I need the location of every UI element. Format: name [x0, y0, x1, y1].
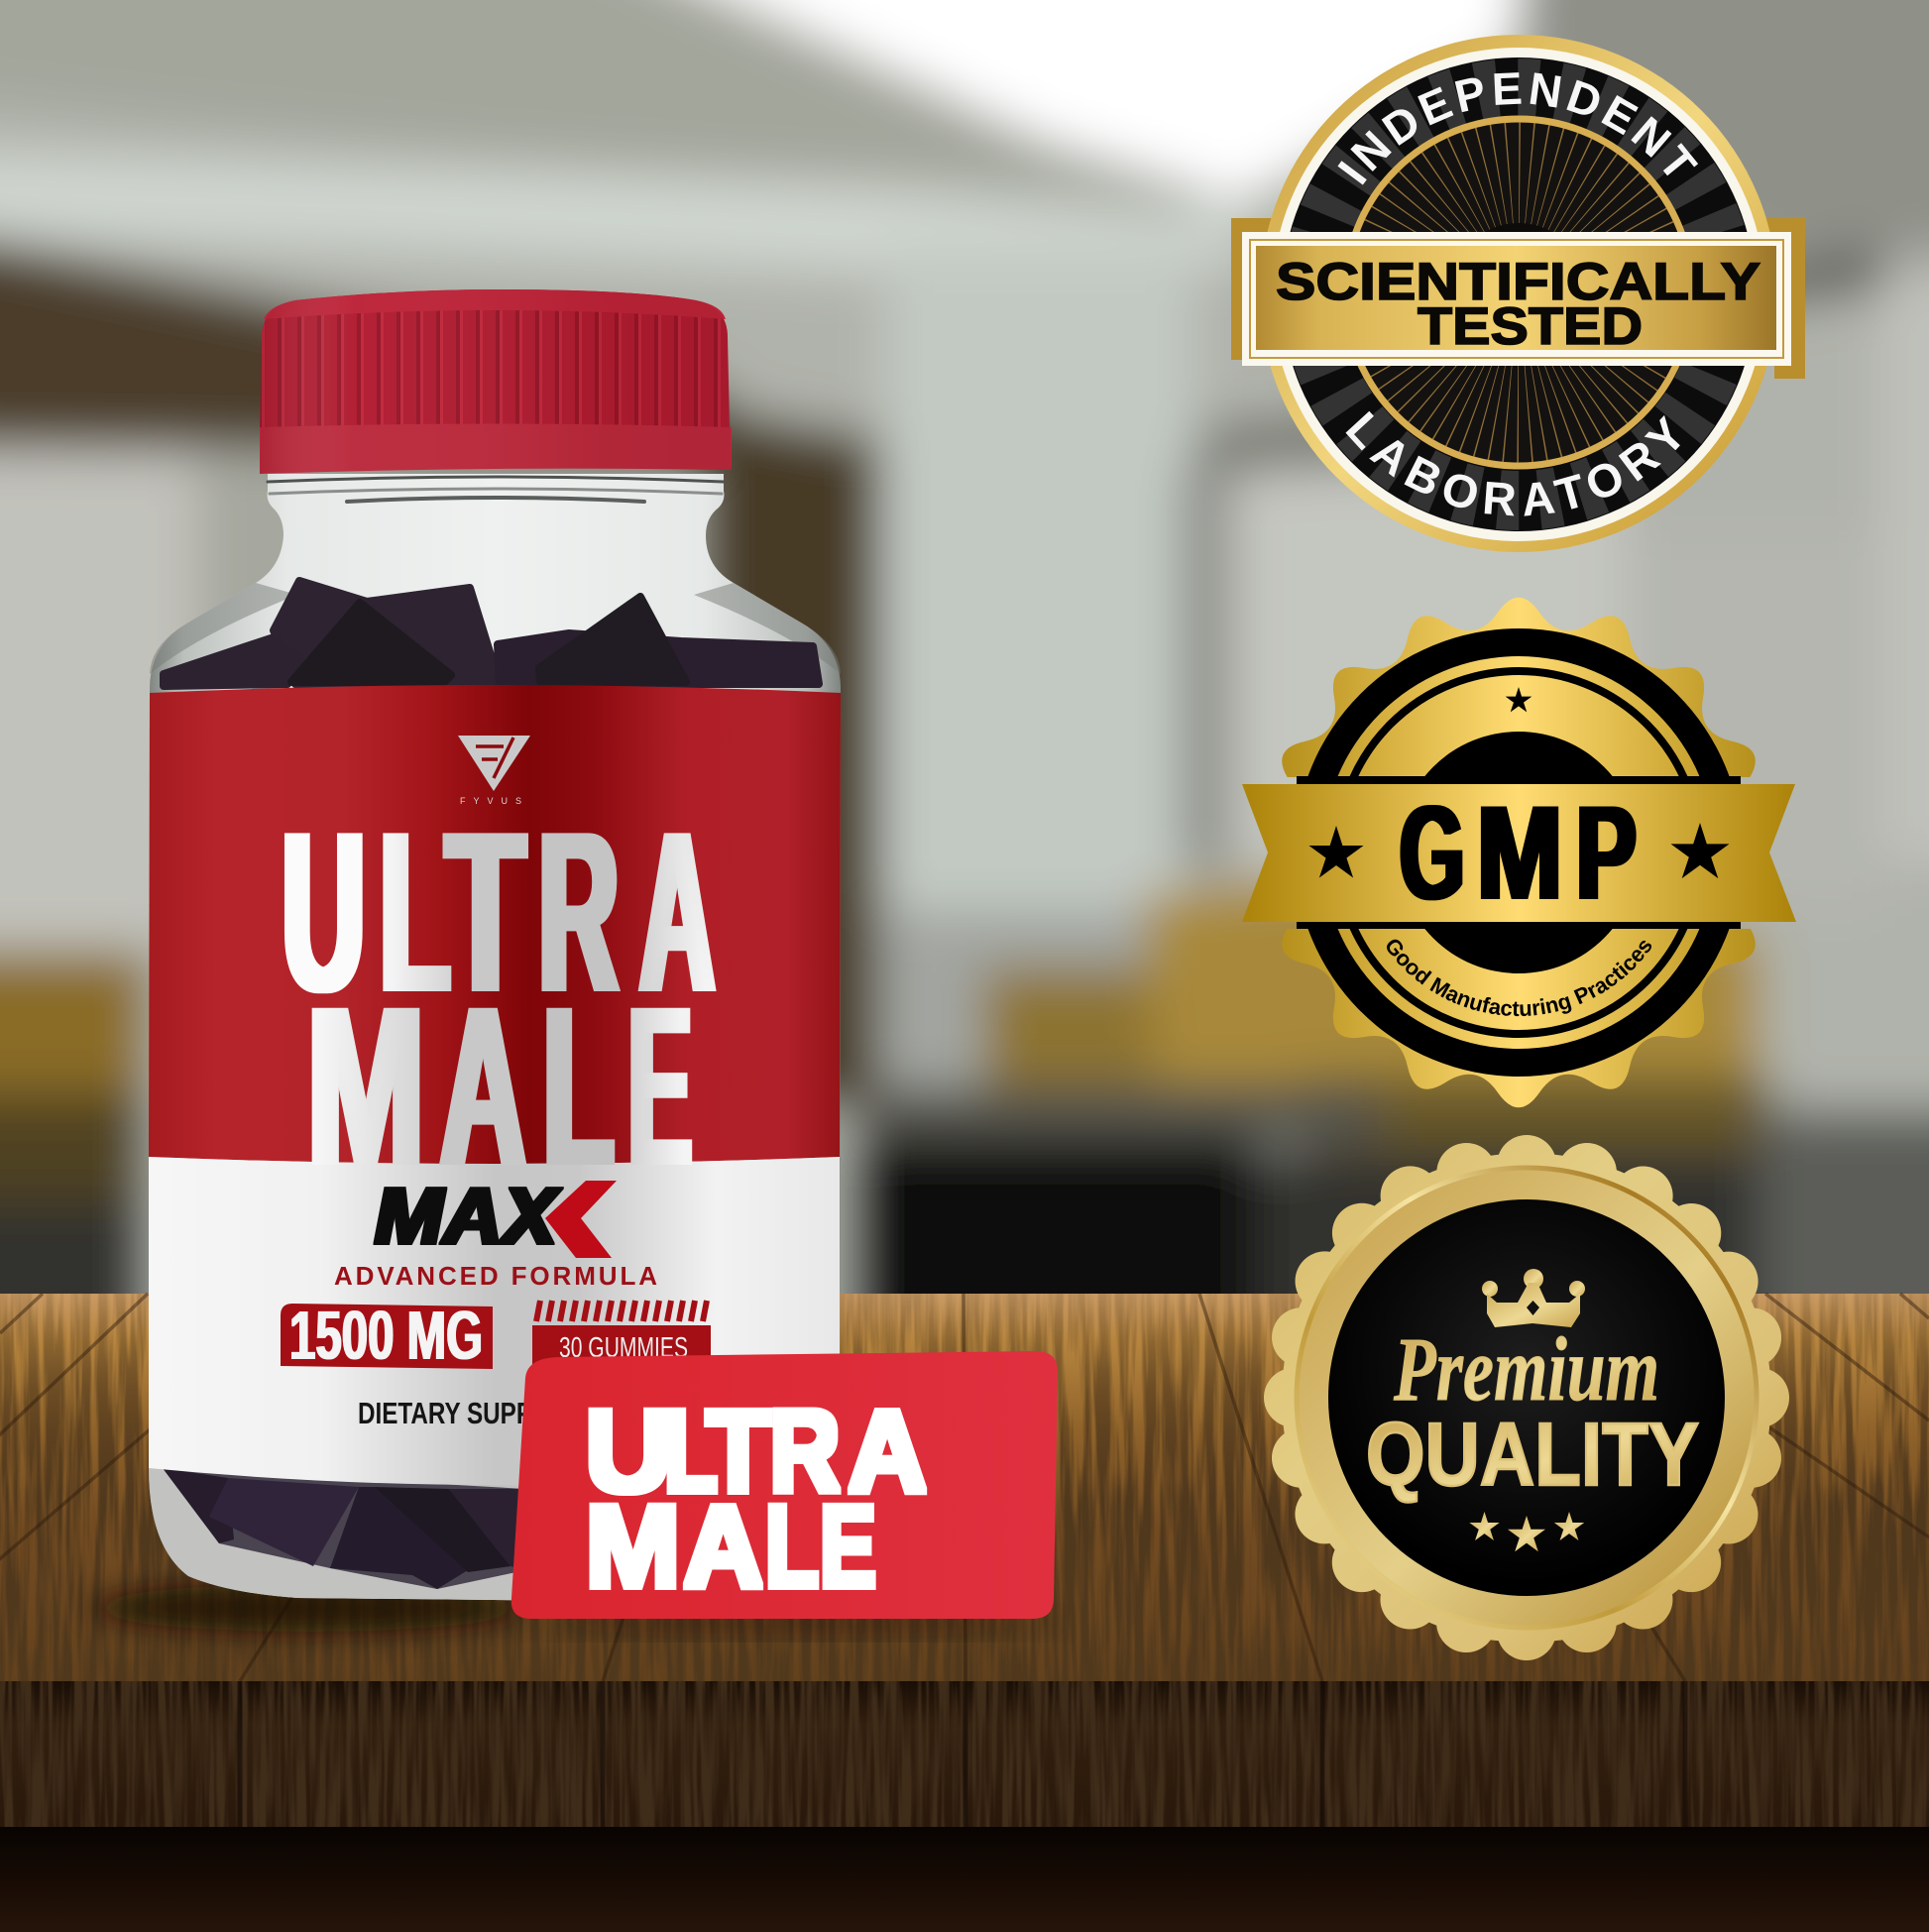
shadow under card: [525, 1614, 1061, 1630]
neck reflections: [268, 477, 724, 502]
title MALE: A: [440, 958, 525, 1213]
title MALE: L: [543, 959, 614, 1213]
ribbon star right: [1671, 823, 1729, 878]
crown icon: [1482, 1269, 1585, 1327]
curved text good manufacturing practices: Good Manufacturing Practices: [1380, 933, 1657, 1021]
glass bottom: [149, 1457, 840, 1601]
title ULTRA: A: [640, 784, 715, 1041]
title MALE: M: [307, 959, 424, 1213]
card text ULTRA: U: [585, 1387, 671, 1517]
30 gummies box: [532, 1325, 711, 1375]
GMP text: [1400, 777, 1637, 928]
card text ULTRA: L: [664, 1386, 718, 1517]
back ribbon: [1231, 218, 1805, 379]
1500 MG badge: [281, 1297, 493, 1374]
three stars: [1469, 1512, 1584, 1551]
label: red section: [149, 685, 841, 1164]
advanced formula: ADVANCED FORMULA: [334, 1261, 657, 1291]
card text ULTRA: A: [849, 1387, 927, 1517]
title ULTRA: R: [539, 783, 619, 1041]
gold rings: [1297, 1168, 1757, 1628]
shoulder shading: [150, 583, 841, 674]
outer gold ring: [1260, 35, 1777, 552]
band text TESTED: TESTED: [1418, 297, 1643, 356]
dietary supplement text: DIETARY SUPP: [358, 1396, 532, 1430]
band text SCIENTIFICALLY: SCIENTIFICALLY: [1276, 253, 1760, 311]
gold seal: [1264, 598, 1773, 1107]
quality text: QUALITY: [1366, 1406, 1699, 1505]
hatch decoration: [536, 1301, 707, 1321]
plank seams: [0, 1294, 1929, 1681]
table front edge: [0, 1681, 1929, 1827]
inner starburst: [1345, 119, 1692, 466]
MAX logo: MAX: [375, 1170, 562, 1262]
blurred room background: [0, 0, 1929, 1375]
front plank seams: [240, 1681, 1685, 1827]
shadow under product: [89, 1584, 525, 1632]
title MALE: E: [628, 960, 691, 1214]
gummies bottom: [163, 1468, 525, 1589]
card text MALE: M: [585, 1480, 681, 1612]
black striped ring: [1282, 57, 1756, 531]
label: white section: [149, 1157, 840, 1485]
black strips beside ribbon: [1297, 776, 1741, 929]
card text ULTRA: R: [769, 1386, 840, 1517]
bottle cap: [260, 289, 732, 474]
table top surface: [0, 1294, 1929, 1681]
badge: GMP: [1242, 597, 1796, 1108]
title ULTRA: T: [446, 783, 525, 1040]
premium script text: Premium: [1393, 1318, 1659, 1420]
brand logo: [458, 736, 530, 806]
gummies top: [164, 581, 819, 686]
card text MALE: L: [765, 1481, 819, 1612]
card text MALE: E: [821, 1480, 875, 1612]
badge: premium quality: [1282, 1153, 1771, 1643]
title ULTRA: L: [380, 783, 450, 1040]
GMP text: P: [1576, 777, 1637, 928]
ribbon: [1242, 784, 1796, 922]
badge: scientifically tested: [1231, 35, 1805, 552]
curved text INDEPENDENT: INDEPENDENT: [1338, 72, 1699, 184]
wooden table: [0, 1294, 1929, 1932]
card text MALE: [585, 1480, 875, 1612]
title ULTRA: U: [282, 783, 365, 1040]
GMP text: M: [1477, 777, 1562, 928]
glass body: [149, 474, 841, 1601]
title ULTRA: [282, 783, 715, 1041]
title band: [1242, 232, 1791, 366]
1500 MG badge: 1500 MG: [289, 1297, 483, 1374]
table dark lower band: [0, 1827, 1929, 1932]
card text MALE: A: [684, 1481, 763, 1612]
black disc: [1328, 1199, 1725, 1596]
title MALE: [307, 958, 691, 1214]
30 gummies box: 30 GUMMIES: [559, 1332, 688, 1364]
card text ULTRA: T: [706, 1385, 770, 1517]
GMP text: G: [1400, 777, 1465, 928]
product bottle: [149, 289, 841, 1601]
scalloped gold seal: [1282, 1153, 1771, 1643]
card text ULTRA: [585, 1385, 927, 1517]
red sample card: [511, 1351, 1058, 1619]
ribbon star left: [1308, 826, 1364, 877]
brand logo: FYVUS: [460, 796, 529, 806]
top star: [1506, 687, 1532, 712]
curved text LABORATORY: LABORATORY: [1346, 410, 1680, 516]
